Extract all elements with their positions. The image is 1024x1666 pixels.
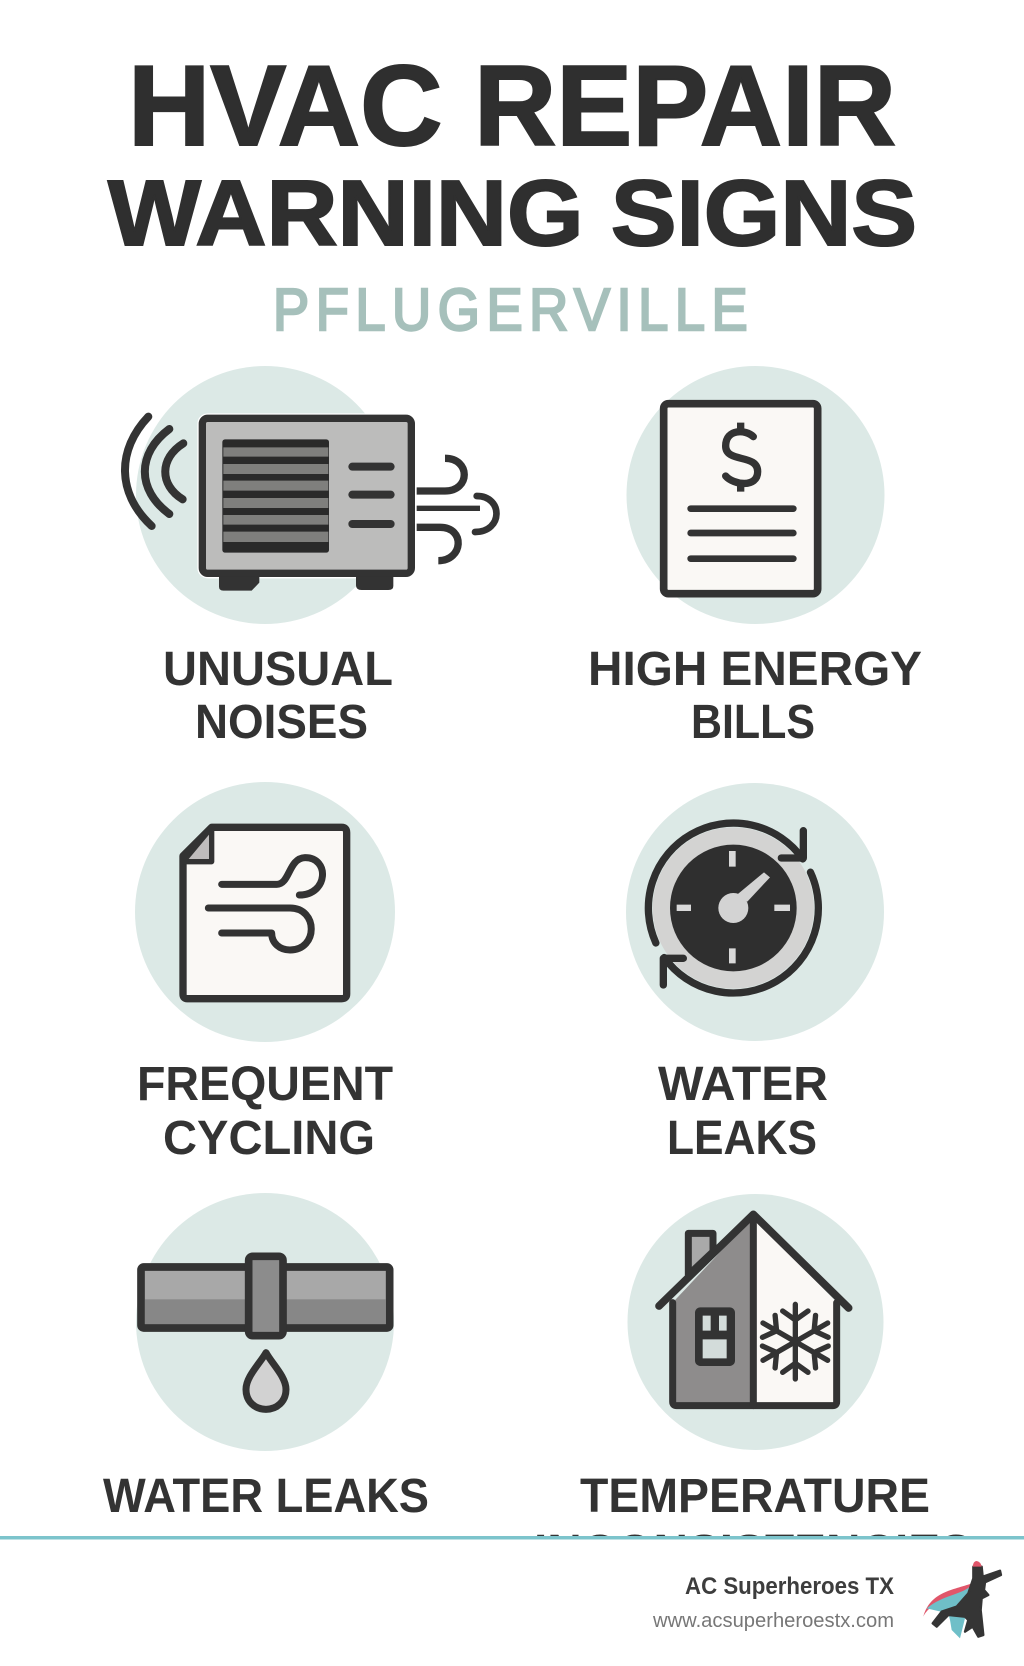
circle background xyxy=(628,1194,884,1450)
website: www.acsuperheroestx.com xyxy=(652,1610,894,1632)
label: CYCLING xyxy=(163,1112,375,1165)
panel: frequent cycling xyxy=(135,782,395,1165)
icon: bill with dollar sign xyxy=(664,404,818,594)
label: LEAKS xyxy=(667,1112,817,1165)
title: HVAC REPAIR xyxy=(128,43,896,170)
label: NOISES xyxy=(195,696,368,749)
label xyxy=(588,643,922,749)
title xyxy=(108,43,917,265)
circle background xyxy=(626,366,884,624)
label: WATER xyxy=(658,1058,828,1111)
icon: leaking pipe xyxy=(141,1256,390,1409)
subtitle: Pflugerville: PFLUGERVILLE xyxy=(273,278,748,344)
panel: water leaks (gauge) xyxy=(626,783,884,1165)
label: WATER LEAKS xyxy=(103,1470,429,1523)
label: TEMPERATURE xyxy=(580,1470,930,1523)
panel: high energy bills xyxy=(588,366,922,749)
footer xyxy=(0,1536,1024,1666)
circle background xyxy=(626,783,884,1041)
label: FREQUENT xyxy=(137,1058,393,1111)
circle background xyxy=(136,366,394,624)
label: BILLS xyxy=(691,696,815,749)
label xyxy=(163,643,393,749)
label xyxy=(137,1058,393,1165)
panel: temperature inconsistencies xyxy=(534,1194,972,1579)
label: UNUSUAL xyxy=(163,643,393,696)
circle background xyxy=(135,782,395,1042)
icon: noisy AC unit xyxy=(125,417,496,591)
icon: half warm half cold house xyxy=(659,1214,849,1406)
label xyxy=(534,1470,972,1579)
brand name: AC Superheroes TX xyxy=(685,1573,894,1600)
title: WARNING SIGNS xyxy=(108,161,917,265)
icon: superhero logo xyxy=(923,1561,1001,1638)
panel: water leaks (pipe) xyxy=(103,1193,429,1523)
label: HIGH ENERGY xyxy=(588,643,922,696)
panel: unusual noises xyxy=(125,366,496,749)
icon: gauge with cycle arrows xyxy=(648,823,818,993)
label xyxy=(658,1058,828,1165)
icon: document with airflow xyxy=(183,827,347,999)
label: INCONSISTENCIES xyxy=(534,1526,972,1579)
icon: snowflake xyxy=(757,1304,834,1379)
circle background xyxy=(136,1193,394,1451)
